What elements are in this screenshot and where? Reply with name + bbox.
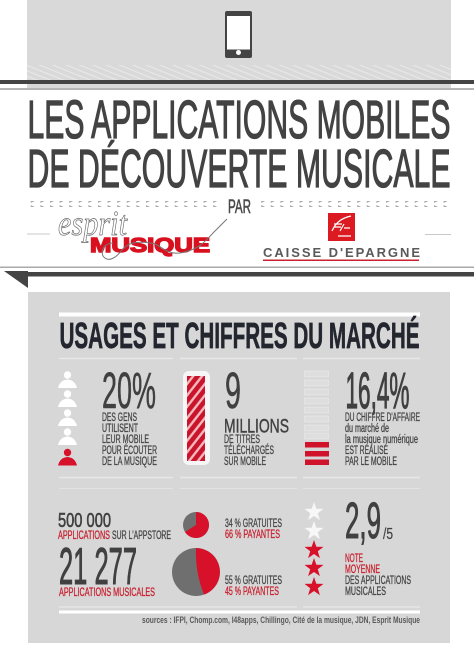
- stat: 9 millions: 9: [225, 362, 241, 419]
- stat: 20%: [102, 362, 157, 468]
- icon: smartphone: [225, 11, 252, 58]
- stat: 9 millions: DE TITRES: [224, 434, 260, 446]
- legend: all applications: 66 % PAYANTES: [225, 529, 280, 541]
- byline: par: [27, 197, 451, 218]
- stat: 2,9 / 5 rating: DES APPLICATIONS: [345, 575, 411, 587]
- stat: 16,4%: PAR LE MOBILE: [345, 456, 397, 468]
- heading: [59, 312, 420, 488]
- stat: 9 millions: SUR MOBILE: [224, 456, 266, 468]
- panel: header band: [0, 0, 474, 90]
- stat: 21 277 applications musicales: [59, 538, 155, 599]
- title: [28, 90, 450, 199]
- stat: 20%: LEUR MOBILE: [102, 434, 149, 446]
- stat: 16,4%: [345, 362, 420, 468]
- pie chart: all applications: [183, 512, 209, 538]
- stat: 500 000 applications: SUR L'APPSTORE: [112, 530, 171, 542]
- icon: five people, one highlighted: [58, 371, 77, 466]
- icon: star rating: [304, 502, 324, 595]
- stat: 500 000 applications: 500 000: [58, 509, 111, 532]
- stat: 2,9 / 5 rating: NOTE: [345, 553, 363, 565]
- legend: all applications: 34 % GRATUITES: [225, 518, 282, 530]
- logo: Caisse d'Epargne: CAISSE D'EPARGNE: [263, 245, 420, 260]
- stat: 20%: UTILISENT: [102, 423, 138, 435]
- byline: par: PAR: [228, 197, 251, 218]
- chart: stacked bars, 3 of 11 highlighted: [304, 371, 329, 465]
- stat: 2,9 / 5 rating: 2,9: [345, 492, 381, 549]
- stat: 9 millions: TÉLÉCHARGÉS: [224, 444, 274, 457]
- logo: Esprit Musique: MUSIQUE: [90, 235, 210, 257]
- legend: music applications: 45 % PAYANTES: [225, 586, 279, 598]
- logo: Esprit Musique: [27, 204, 227, 259]
- pie chart: music applications: [172, 548, 220, 596]
- stat: 2,9 / 5 rating: [345, 492, 411, 598]
- stat: 2,9 / 5 rating: /5: [383, 526, 393, 543]
- divider arrow: [0, 266, 474, 288]
- stat: 2,9 / 5 rating: MUSICALES: [345, 586, 386, 598]
- stat: 9 millions: MILLIONS: [224, 416, 289, 438]
- stat: 16,4%: la musique numérique: [345, 434, 418, 446]
- stat: 21 277 applications musicales: APPLICATIONS MUSICALES: [59, 587, 155, 599]
- stat: 16,4%: EST RÉALISÉ: [345, 444, 388, 457]
- logo: Esprit Musique: esprit: [58, 204, 128, 243]
- stat: 16,4%: DU CHIFFRE D'AFFAIRE: [345, 412, 420, 424]
- stat: 21 277 applications musicales: 21 277: [59, 538, 137, 596]
- stat: 20%: 20%: [102, 362, 156, 419]
- sources: [59, 607, 420, 626]
- stat: 2,9 / 5 rating: MOYENNE: [345, 564, 380, 576]
- legend: music applications: [225, 575, 282, 598]
- legend: music applications: 55 % GRATUITES: [225, 575, 282, 587]
- icon: striped tube: [183, 371, 210, 465]
- stat: 20%: DE LA MUSIQUE: [102, 456, 157, 468]
- stat: 16,4%: du marché de: [345, 423, 389, 435]
- logo: Caisse d'Epargne: [263, 213, 451, 261]
- legend: all applications: [225, 518, 282, 541]
- stat: 20%: POUR ÉCOUTER: [102, 444, 157, 457]
- stat: 9 millions: [224, 362, 289, 468]
- stat: 20%: DES GENS: [102, 412, 137, 424]
- stat: 500 000 applications: APPLICATIONS: [58, 530, 110, 542]
- panel: market figures: [28, 292, 450, 643]
- stat: 500 000 applications: [58, 509, 171, 542]
